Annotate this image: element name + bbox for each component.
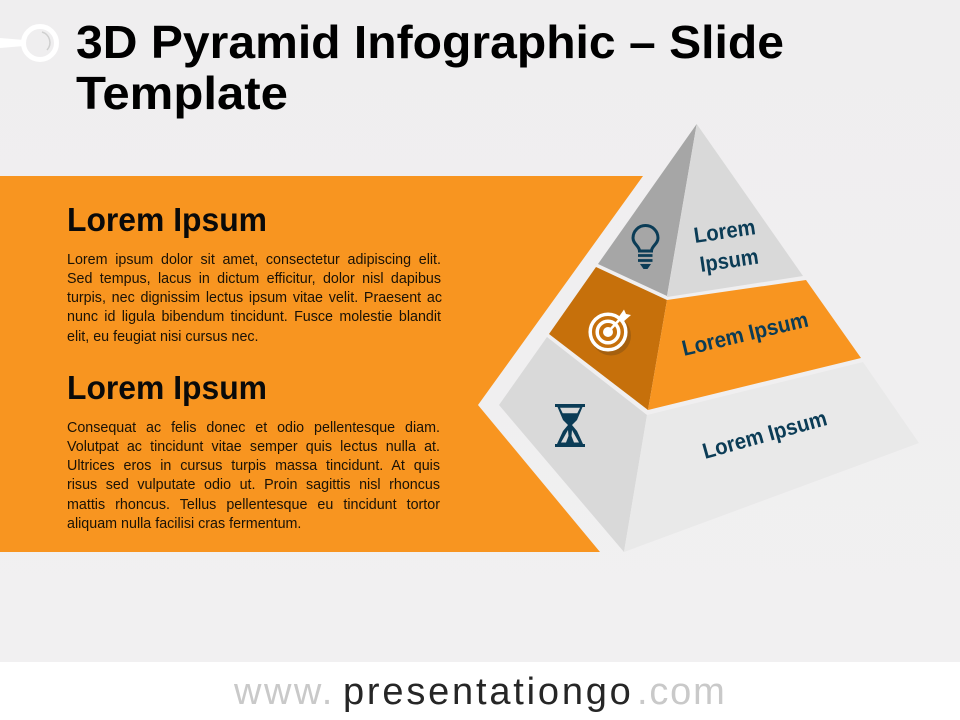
heading: first section: Lorem Ipsum [67, 201, 267, 238]
pyramid bottom tier [499, 337, 919, 552]
label: top tier: Ipsum [698, 244, 760, 277]
chart: 3D pyramid [499, 124, 919, 552]
text block: first section [67, 250, 443, 348]
title [76, 16, 784, 119]
footer url: presentationgo [343, 671, 634, 713]
icon: light bulb [633, 225, 658, 269]
text block: first section: elit, eu feugiat nisi cursus nec. [67, 328, 259, 344]
text block: second section [67, 418, 443, 534]
footer url [233, 671, 727, 713]
text block: second section: aliquam nulla facilisi cras fermentum. [67, 516, 301, 532]
icon: target [588, 310, 631, 356]
pyramid top tier [598, 124, 803, 297]
text block: first section: turpis, nec dignissim lectus ipsum vitae velit. Praesent ac [67, 290, 442, 306]
text block: second section: Consequat ac felis donec et odio pellentesque diam. [67, 420, 440, 436]
icon: hourglass [555, 404, 585, 447]
title: Template [76, 67, 288, 119]
text block: first section: Lorem ipsum dolor sit amet, consectetur adipiscing elit. [67, 252, 441, 268]
label: top tier: Lorem [692, 214, 757, 248]
footer url: www. [233, 671, 335, 713]
heading: second section: Lorem Ipsum [67, 369, 267, 406]
label: middle tier: Lorem Ipsum [679, 307, 811, 361]
text block: second section: Ultrices eros in cursus turpis massa tincidunt. At quis [67, 458, 440, 474]
label: top tier [692, 214, 760, 277]
text block: first section: nunc id ligula bibendum tincidunt. Fusce molestie blandit [67, 309, 441, 325]
footer url: .com [637, 671, 727, 713]
title: 3D Pyramid Infographic – Slide [76, 16, 784, 68]
text block: second section: risus sed vulputate odio ut. Proin sagittis nisl rhoncus [67, 477, 440, 493]
panel: orange text panel [0, 176, 643, 552]
label: bottom tier: Lorem Ipsum [700, 405, 830, 464]
text block: second section: Volutpat ac tincidunt vitae semper quis lectus nulla at. [67, 439, 440, 455]
text block: first section: Sed tempus, lacus in dictum efficitur, dolor nisl dapibus [67, 271, 441, 287]
footer band [0, 662, 960, 720]
icon: pin [0, 26, 56, 60]
text block: second section: mattis rhoncus. Tellus pellentesque eu tincidunt tortor [67, 496, 440, 512]
pyramid middle tier [549, 267, 861, 410]
